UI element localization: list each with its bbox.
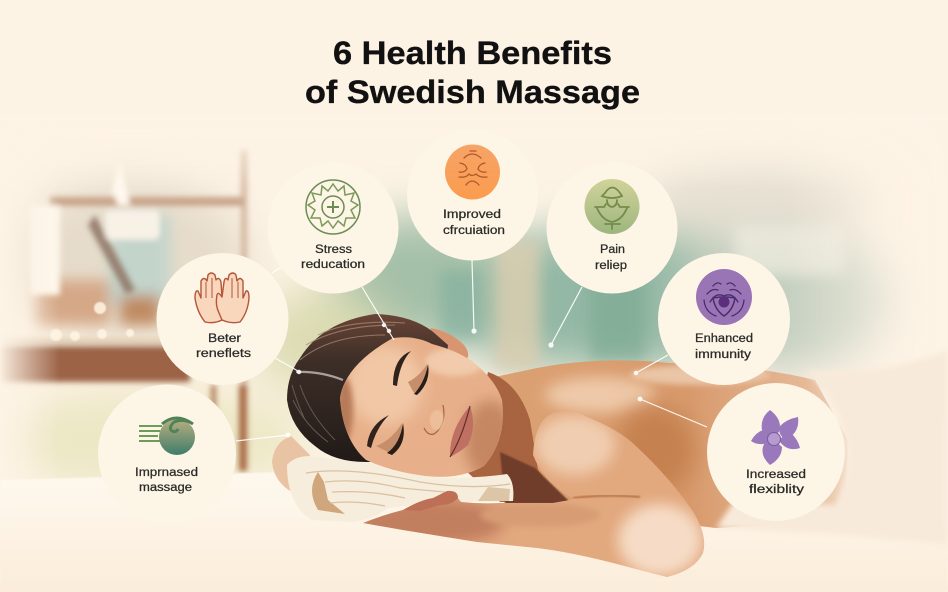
title — [305, 35, 640, 110]
fingers — [403, 491, 458, 511]
panel: improved circulation — [407, 130, 538, 260]
panel: increased flexibility: Increased — [746, 469, 806, 481]
nose — [424, 405, 444, 434]
panel: increased flexibility — [707, 383, 845, 521]
panel: imprnased massage: massage — [139, 482, 192, 494]
lips — [450, 406, 473, 457]
icon: orange face — [445, 144, 500, 200]
woman: massage client — [272, 314, 948, 585]
towel — [287, 456, 513, 522]
left arm behind towel — [272, 436, 310, 492]
panel: pain reliep: Pain — [600, 244, 625, 256]
panel: enhanced immunity — [658, 253, 790, 385]
panel: stress reducation: reducation — [301, 259, 365, 271]
closed eyes — [376, 364, 429, 455]
icon: purple shield — [696, 269, 752, 325]
panel: stress reducation: Stress — [315, 244, 352, 256]
panel: better reneflets: reneflets — [196, 348, 251, 360]
icon: two open hands — [195, 273, 249, 323]
arm crease — [573, 496, 640, 498]
icon: green mandala — [306, 180, 360, 234]
icon: swirl ball — [139, 418, 195, 455]
panel: better reneflets: Beter — [208, 333, 241, 345]
panel: increased flexibility: flexiblity — [749, 484, 804, 496]
panel: improved circulation: cfrcuiation — [443, 225, 505, 237]
back and shoulders — [498, 360, 848, 528]
right arm — [363, 412, 704, 577]
panel: imprnased massage: Imprnased — [135, 467, 198, 479]
title: 6 Health Benefits — [333, 35, 612, 71]
hair — [287, 314, 448, 462]
panel: stress reducation — [268, 162, 398, 294]
panel: enhanced immunity: immunity — [695, 349, 751, 361]
panel: enhanced immunity: Enhanced — [695, 333, 753, 345]
panel: imprnased massage — [98, 384, 236, 522]
icon: green figure — [584, 179, 640, 234]
panel: better reneflets — [156, 253, 288, 385]
face — [340, 337, 503, 477]
massage table — [0, 472, 948, 592]
sheet over lower body — [716, 350, 948, 545]
connector lines — [236, 260, 707, 441]
ear — [430, 328, 468, 360]
panel: improved circulation: Improved — [443, 209, 501, 221]
icon: purple flower — [751, 410, 800, 465]
title: of Swedish Massage — [305, 74, 640, 110]
panel: pain reliep: reliep — [595, 260, 627, 272]
eyebrows — [367, 351, 411, 448]
panel: pain reliep — [546, 162, 678, 294]
neck — [465, 372, 562, 502]
